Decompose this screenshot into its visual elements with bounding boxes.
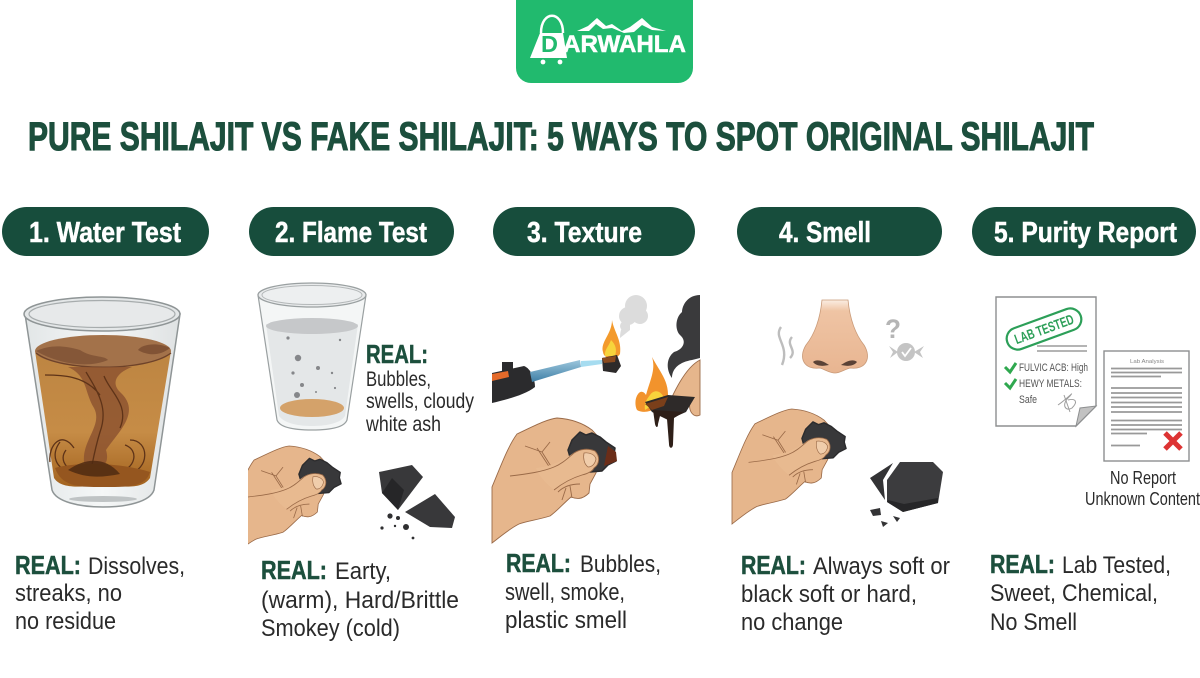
icon: nose xyxy=(802,300,868,373)
icon: cracked resin chunk xyxy=(870,462,943,527)
icon: unverified report with red cross: Lab Analysis xyxy=(1130,359,1165,365)
text: water test description: streaks, no xyxy=(15,580,122,607)
icon: broken resin pieces xyxy=(379,465,455,539)
text: no report caption xyxy=(1085,468,1200,509)
text: smell description: REAL: xyxy=(741,550,806,580)
text: purity report description: No Smell xyxy=(990,609,1077,636)
text: flame test real note xyxy=(365,339,474,436)
icon: shopping bag xyxy=(530,16,567,64)
text: no report caption: No Report xyxy=(1110,468,1176,488)
icon: blow torch xyxy=(492,360,602,403)
report results: FULVIC ACB: High xyxy=(1019,362,1088,374)
report results: Safe xyxy=(1019,394,1037,406)
pill: 4. Smell xyxy=(737,207,942,256)
pill: 2. Flame Test: 2. Flame Test xyxy=(275,217,427,249)
text: flame test description: REAL: xyxy=(261,555,327,585)
text: purity report description: Sweet, Chemical, xyxy=(990,580,1158,607)
report results xyxy=(1019,362,1088,406)
icon: smell waves xyxy=(779,327,793,365)
text: purity report description xyxy=(990,549,1171,636)
icon: hand holding resin, column 4 xyxy=(732,409,846,524)
icon: lab tested report xyxy=(996,297,1096,426)
icon: burning sample with grey smoke xyxy=(602,295,648,373)
text: flame test description: Earty, xyxy=(335,558,391,585)
text: flame test description xyxy=(261,555,459,642)
text: smell description: Always soft or xyxy=(813,553,950,580)
text: purity report description: Lab Tested, xyxy=(1062,552,1171,579)
icon: candy with check xyxy=(889,343,924,361)
icon: mountains xyxy=(577,18,666,33)
pill: 5. Purity Report xyxy=(972,207,1196,256)
logo badge xyxy=(516,0,693,83)
text: flame test real note: REAL: xyxy=(366,339,428,369)
icon: glass with bubbles and ash xyxy=(258,283,366,430)
icon: unverified report with red cross xyxy=(1104,351,1189,461)
pill: 1. Water Test: 1. Water Test xyxy=(29,217,181,249)
text: flame test description: Smokey (cold) xyxy=(261,615,400,642)
text: texture description: REAL: xyxy=(506,548,571,578)
text: water test description: Dissolves, xyxy=(88,553,185,580)
stamp: lab tested: LAB TESTED xyxy=(1012,311,1076,347)
icon: question mark: ? xyxy=(885,314,901,344)
icon: melting sample with dark smoke xyxy=(635,295,700,448)
text: water test description xyxy=(15,550,185,635)
text: water test description: no residue xyxy=(15,608,116,635)
text: flame test real note: swells, cloudy xyxy=(366,390,474,413)
icon: glass of dissolving shilajit xyxy=(24,297,180,507)
text: texture description: Bubbles, xyxy=(580,551,661,578)
text: flame test real note: Bubbles, xyxy=(366,368,431,391)
icon: shopping bag: D xyxy=(541,31,558,57)
text: water test description: REAL: xyxy=(15,550,81,580)
pill: 3. Texture xyxy=(493,207,695,256)
text: purity report description: REAL: xyxy=(990,549,1055,579)
icon: hand holding resin, column 2 xyxy=(248,446,342,544)
logo wordmark: ARWAHLA xyxy=(563,31,686,58)
pill: 1. Water Test xyxy=(2,207,209,256)
icon: hand holding resin, column 3 xyxy=(492,418,617,543)
text: flame test description: (warm), Hard/Brittle xyxy=(261,587,459,614)
text: flame test real note: white ash xyxy=(365,413,441,436)
text: texture description xyxy=(505,548,661,634)
checks xyxy=(1005,363,1016,388)
pill: 4. Smell: 4. Smell xyxy=(779,217,871,249)
text: smell description: no change xyxy=(741,609,843,636)
text: texture description: plastic smell xyxy=(505,607,627,634)
text: texture description: swell, smoke, xyxy=(505,579,625,606)
text: smell description xyxy=(741,550,950,636)
text: smell description: black soft or hard, xyxy=(741,581,917,608)
pill: 2. Flame Test xyxy=(249,207,454,256)
pill: 3. Texture: 3. Texture xyxy=(527,217,642,249)
report results: HEWY METALS: xyxy=(1019,378,1082,390)
